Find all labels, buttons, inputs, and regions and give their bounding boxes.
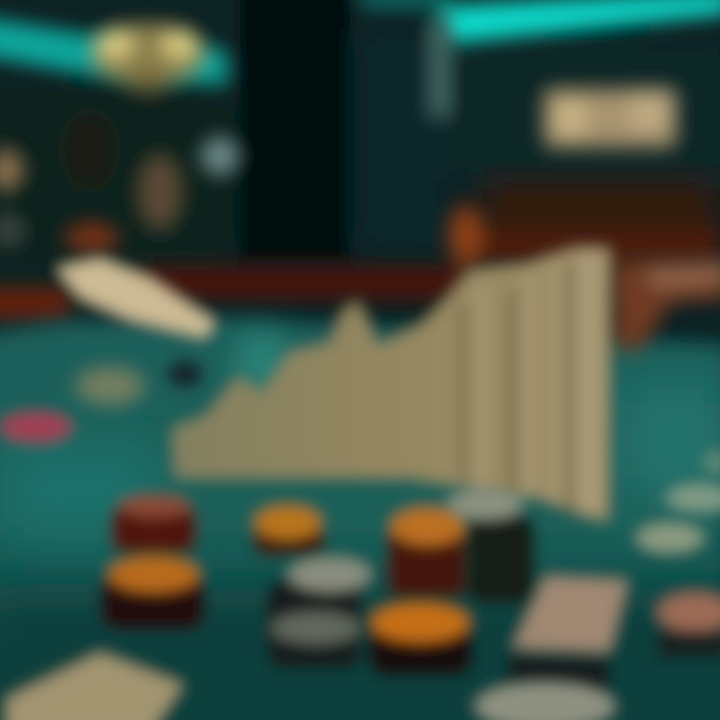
card on rail <box>55 258 216 338</box>
scattered cards right <box>506 576 628 692</box>
pink marker on felt <box>0 412 72 442</box>
chart darker folds <box>458 266 574 511</box>
chip stack center white <box>268 557 372 668</box>
left background figures and lights <box>0 114 238 252</box>
pale column glow <box>428 18 452 118</box>
right hand <box>612 262 720 350</box>
room back wall details <box>0 30 720 260</box>
chip pale right <box>636 450 720 553</box>
chip stack orange front <box>370 602 472 675</box>
chip pink right edge <box>657 592 720 658</box>
black column <box>240 0 350 260</box>
chip stack orange tall <box>388 507 466 597</box>
chart silhouette <box>172 248 610 522</box>
small dark chip on felt <box>167 360 203 388</box>
card bottom left <box>6 652 184 720</box>
wall picture right <box>545 90 675 146</box>
cream chip on felt <box>76 368 144 404</box>
chip stack left <box>102 495 204 629</box>
table rail <box>0 206 720 318</box>
teal ceiling light left <box>0 18 228 84</box>
felt bright highlight <box>234 332 290 392</box>
chart vertical folds <box>476 252 600 514</box>
felt dark lower area <box>0 380 720 720</box>
chip stack orange small <box>254 505 324 555</box>
chip stack dark right <box>447 489 534 603</box>
felt table <box>0 318 720 720</box>
card bottom right <box>475 682 615 720</box>
chandelier <box>92 24 204 92</box>
teal ceiling light right <box>360 0 720 42</box>
rising paper chart <box>172 248 610 522</box>
